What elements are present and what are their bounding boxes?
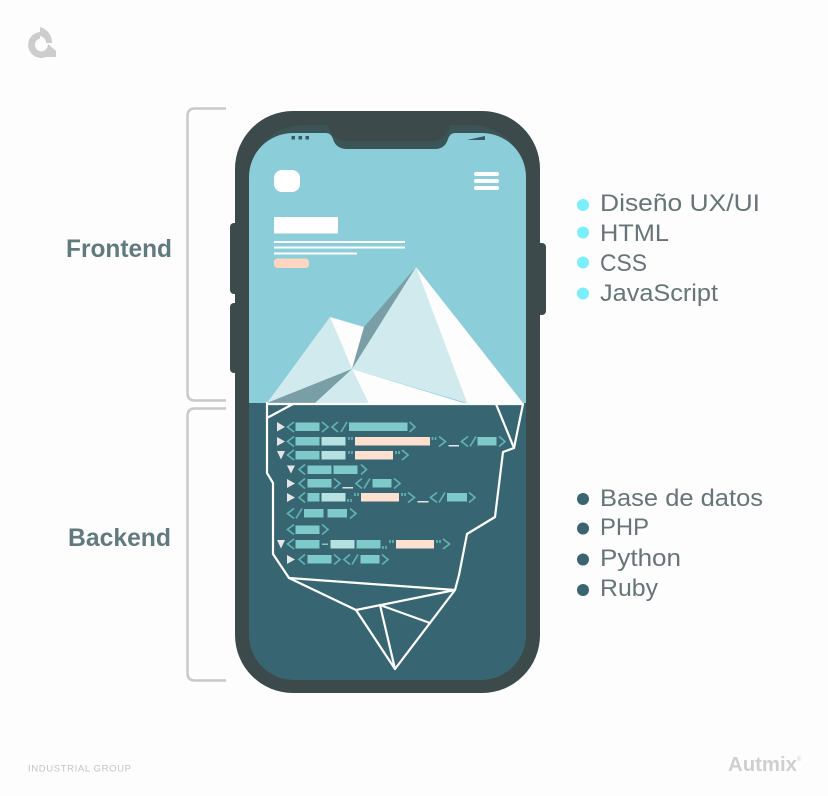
app logo placeholder	[274, 170, 300, 192]
frontend items: JavaScript	[600, 280, 718, 307]
footer: Autmix brand: ®	[797, 756, 802, 763]
phone	[230, 111, 546, 693]
backend items: Base de datos	[600, 485, 763, 512]
heading: Backend: Backend	[68, 524, 171, 552]
code line 9	[277, 539, 450, 549]
hero button	[274, 258, 309, 268]
code block	[277, 422, 505, 564]
list: frontend	[577, 190, 760, 307]
code line 5	[287, 478, 400, 488]
code line 4	[287, 464, 366, 474]
code line 10	[287, 554, 388, 564]
backend items: Python	[600, 545, 681, 572]
screen: sky	[249, 133, 526, 404]
frontend items: Diseño UX/UI	[600, 190, 760, 217]
frontend items: CSS	[600, 250, 647, 277]
code line 6	[287, 492, 475, 502]
backend items	[600, 485, 763, 602]
iceberg above water	[267, 267, 523, 404]
status icons	[292, 136, 485, 140]
notch	[328, 111, 450, 141]
code line 7	[288, 508, 356, 518]
code line 1	[277, 422, 415, 432]
code line 3	[277, 450, 408, 460]
list: backend	[577, 485, 763, 602]
frontend items: HTML	[600, 220, 669, 247]
code line 8	[288, 524, 328, 534]
heading: Frontend: Frontend	[66, 235, 172, 263]
screen: water	[249, 403, 526, 680]
bullet points	[577, 199, 589, 300]
frontend items	[600, 190, 760, 307]
hero text placeholder	[274, 217, 405, 254]
phone body	[235, 111, 540, 693]
phone side buttons	[230, 223, 546, 373]
bullet points	[577, 493, 589, 596]
backend items: Ruby	[600, 575, 658, 602]
code line 2	[277, 436, 505, 446]
iceberg below water outline	[267, 403, 523, 669]
logo	[28, 27, 56, 58]
footer: Autmix brand: Autmix	[728, 753, 798, 776]
bracket: backend	[188, 408, 226, 680]
backend items: PHP	[600, 514, 649, 541]
bracket: frontend	[188, 108, 226, 400]
hamburger menu	[474, 172, 499, 190]
screen rim	[249, 125, 526, 300]
footer: industrial group: INDUSTRIAL GROUP	[28, 764, 131, 774]
